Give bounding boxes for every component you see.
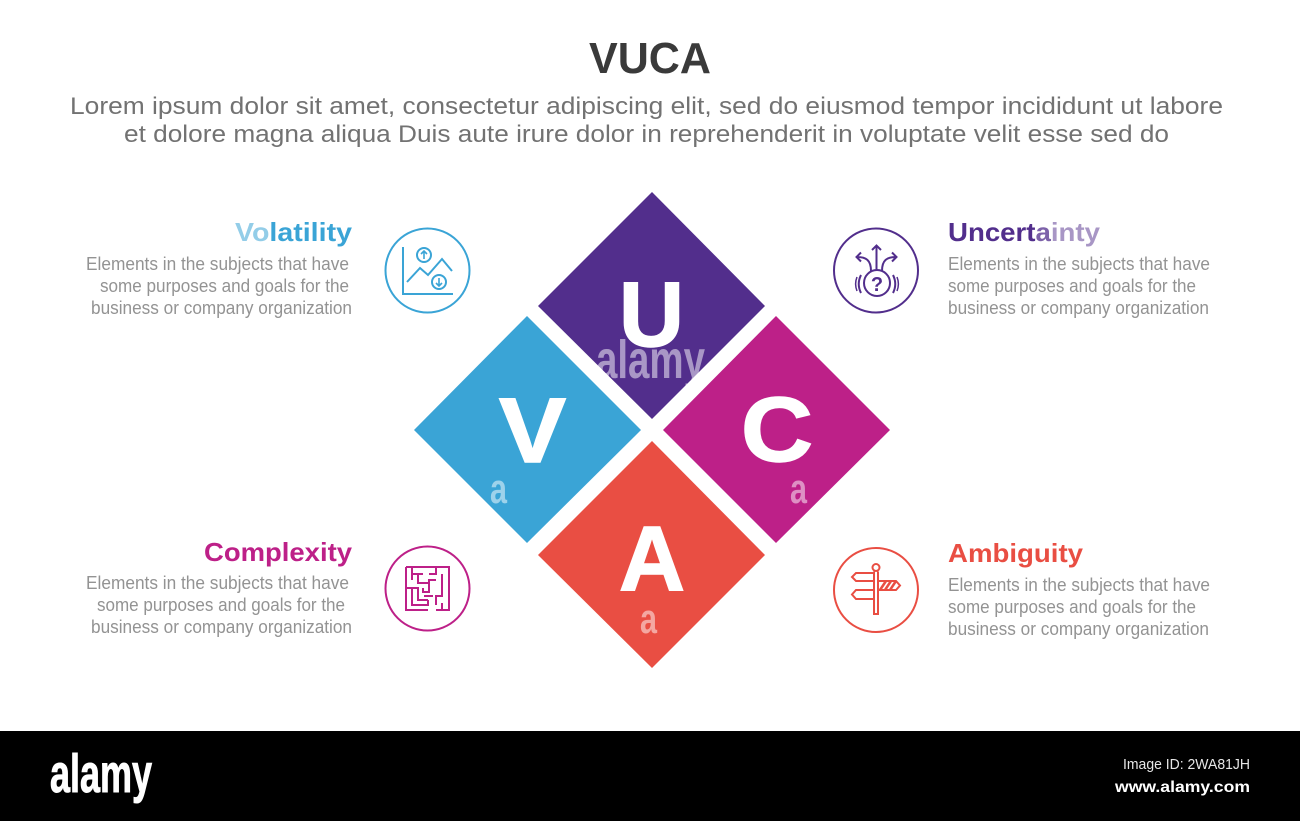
diamond: V volatility: V <box>499 380 566 482</box>
icon: ambiguity signpost <box>834 548 918 632</box>
watermark on diamonds: alamy <box>596 330 705 390</box>
text: ambiguity description <box>948 575 1210 639</box>
icon: uncertainty arrows: ? <box>871 274 883 296</box>
text: volatility description: business or company organization <box>91 298 352 318</box>
text: ambiguity description: Elements in the subjects that have <box>948 575 1210 595</box>
text: complexity description: some purposes and goals for the <box>97 595 345 615</box>
text: volatility description: Elements in the subjects that have <box>86 254 349 274</box>
heading: uncertainty: Uncertainty <box>948 217 1101 247</box>
panel: volatility <box>86 217 470 318</box>
subtitle text: Lorem ipsum dolor sit amet, consectetur adipiscing elit, sed do eiusmod tempor incididunt ut labore <box>70 93 1223 120</box>
watermark on diamonds: a <box>640 595 657 642</box>
text: ambiguity description: business or company organization <box>948 619 1209 639</box>
footer url: www.alamy.com <box>1114 779 1250 796</box>
text: complexity description <box>86 573 352 637</box>
diamond: A ambiguity: A <box>619 508 685 610</box>
icon: complexity maze <box>386 546 470 630</box>
panel: complexity <box>86 537 470 637</box>
heading: ambiguity: Ambiguity <box>948 538 1084 568</box>
diamond: A ambiguity <box>538 441 765 668</box>
title: VUCA <box>589 34 711 83</box>
text: complexity description: business or company organization <box>91 617 352 637</box>
heading: complexity: Complexity <box>204 537 353 567</box>
subtitle text <box>70 93 1223 148</box>
diamond: U uncertainty <box>538 192 765 419</box>
text: volatility description <box>86 254 352 318</box>
diamond: V volatility <box>414 316 641 543</box>
footer image id: Image ID: 2WA81JH <box>1123 756 1250 773</box>
footer logo: alamy <box>50 744 152 804</box>
text: ambiguity description: some purposes and goals for the <box>948 597 1196 617</box>
heading: volatility: Volatility <box>235 217 353 247</box>
subtitle text: et dolore magna aliqua Duis aute irure dolor in reprehenderit in voluptate velit esse sed do <box>124 121 1169 148</box>
watermark on diamonds: a <box>790 465 807 512</box>
watermark on diamonds <box>490 330 807 642</box>
icon: volatility chart <box>386 228 470 312</box>
panel: uncertainty <box>834 217 1210 318</box>
text: complexity description: Elements in the subjects that have <box>86 573 349 593</box>
text: uncertainty description: Elements in the subjects that have <box>948 254 1210 274</box>
diamond: C complexity <box>663 316 890 543</box>
text: uncertainty description <box>948 254 1210 318</box>
footer bar <box>0 731 1300 821</box>
text: volatility description: some purposes and goals for the <box>100 276 349 296</box>
panel: ambiguity <box>834 538 1210 639</box>
diamond: C complexity: C <box>741 379 813 481</box>
text: uncertainty description: business or company organization <box>948 298 1209 318</box>
diamond: U uncertainty: U <box>619 264 684 366</box>
text: uncertainty description: some purposes and goals for the <box>948 276 1196 296</box>
icon: uncertainty arrows <box>834 228 918 312</box>
watermark on diamonds: a <box>490 465 507 512</box>
